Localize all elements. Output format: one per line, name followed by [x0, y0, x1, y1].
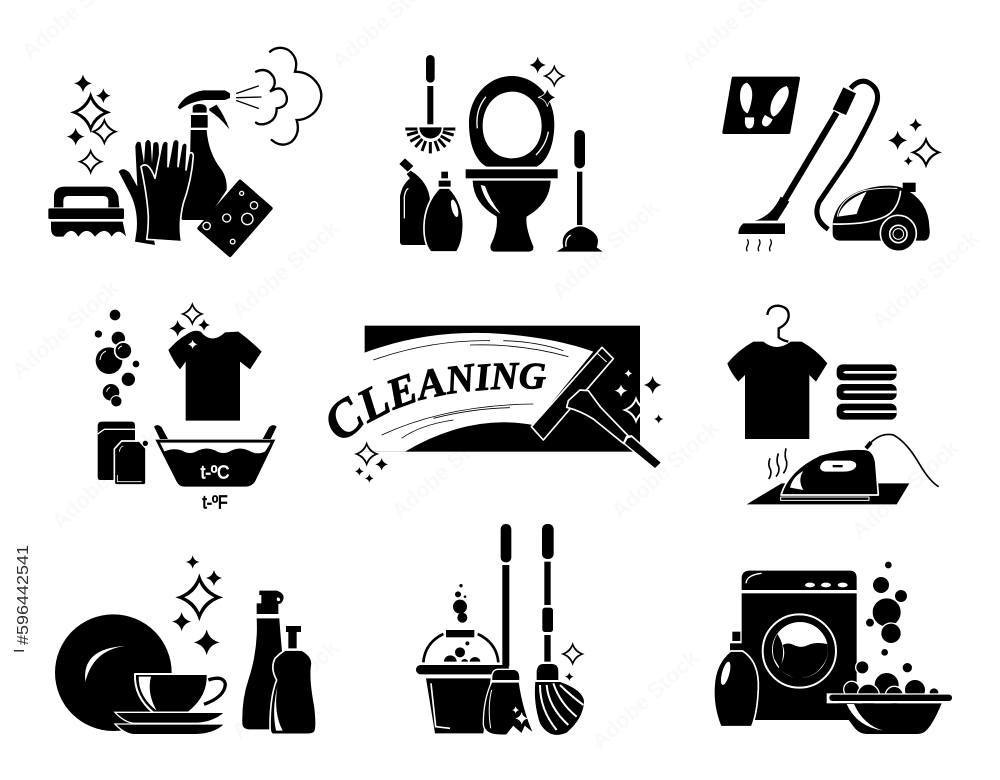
- icon: detergent bottles: [242, 591, 316, 734]
- watermark: Adobe Stock: [387, 415, 504, 524]
- icon: rubber gloves: [119, 139, 193, 245]
- panel: toilet cleaning: [399, 55, 603, 252]
- panel: washing machine: [714, 561, 955, 734]
- heading: cleaning: CLEANING: [328, 362, 546, 438]
- icon: toilet brush: [405, 55, 455, 153]
- icon: hanger: [767, 306, 789, 342]
- icon: steam: [769, 448, 787, 479]
- icon: bucket: [416, 630, 509, 733]
- icon: door mat with footprints: [724, 78, 798, 132]
- watermark: Adobe Stock: [547, 195, 664, 304]
- icon: folded towels: [837, 364, 897, 420]
- icon: soap bubbles: [844, 561, 939, 706]
- panel: bucket broom and mop: [416, 524, 585, 735]
- icon: toilet: [466, 76, 558, 252]
- icon: t-shirt: [168, 331, 262, 421]
- icon: cup: [135, 674, 225, 713]
- icon: t-shirt on hanger: [727, 342, 827, 439]
- temperature fahrenheit label: t-ºF: [202, 492, 228, 513]
- sparkles: [888, 118, 942, 168]
- panel: dishes: [55, 555, 316, 735]
- icon: bubbles: [444, 584, 480, 662]
- banner background: [365, 326, 640, 452]
- panel: laundry washing: [95, 302, 277, 513]
- icon: spray bottle: [178, 90, 230, 220]
- icon: sponge: [199, 182, 271, 255]
- sparkles: [529, 57, 566, 107]
- white swoosh: [360, 333, 593, 452]
- swoosh motion lines: [373, 341, 568, 438]
- icon: plunger: [557, 130, 603, 252]
- icon: vacuum tube and nozzle: [738, 87, 856, 251]
- icon: ironing board: [747, 483, 909, 504]
- sparkles: [169, 302, 210, 337]
- icon: vacuum hose: [817, 81, 878, 229]
- watermark: Adobe Stock: [867, 225, 984, 334]
- icon: squeegee: [531, 347, 663, 471]
- panel: ironing: [727, 306, 939, 504]
- icon: broom head: [483, 669, 534, 735]
- watermark: Adobe Stock: [7, 275, 124, 384]
- icon: wash basin: [154, 425, 277, 487]
- icon: detergent bottle: [714, 632, 758, 727]
- icon: saucers: [115, 712, 225, 735]
- watermark: Adobe Stock: [227, 215, 344, 324]
- icon: detergent packets: [98, 422, 148, 485]
- image id: #596442541: [15, 545, 32, 645]
- icon: broom handle: [501, 524, 511, 667]
- watermark: Adobe Stock: [47, 425, 164, 534]
- icon: iron cord: [866, 434, 939, 487]
- icon: scrub brush: [48, 187, 126, 237]
- icon: plate: [55, 614, 172, 731]
- panel: cleaning banner: [328, 326, 664, 482]
- watermark: Adobe Stock: [607, 415, 724, 524]
- icon: vacuum body: [833, 183, 930, 251]
- sparkles: [354, 369, 663, 483]
- sparkles: [172, 555, 223, 655]
- icon: spray mist: [237, 86, 261, 108]
- watermark: Adobe Stock: [227, 635, 344, 744]
- icon: spray cloud: [256, 48, 321, 145]
- watermark: Adobe Stock: [587, 645, 704, 754]
- panel: vacuum cleaner: [724, 78, 942, 251]
- temperature celsius label: t-ºC: [201, 461, 229, 482]
- icon: iron: [781, 449, 878, 500]
- sparkles: [67, 74, 118, 175]
- icon: washing machine: [742, 571, 857, 720]
- watermark: Adobe Stock: [847, 435, 964, 544]
- icon: wash bowl: [827, 693, 955, 734]
- sparkles: [561, 642, 585, 681]
- icon: cleaner bottles: [399, 158, 463, 252]
- panel: surface cleaning supplies: [48, 48, 321, 255]
- icon: soap bubbles: [95, 310, 139, 407]
- icon: mop: [535, 524, 584, 735]
